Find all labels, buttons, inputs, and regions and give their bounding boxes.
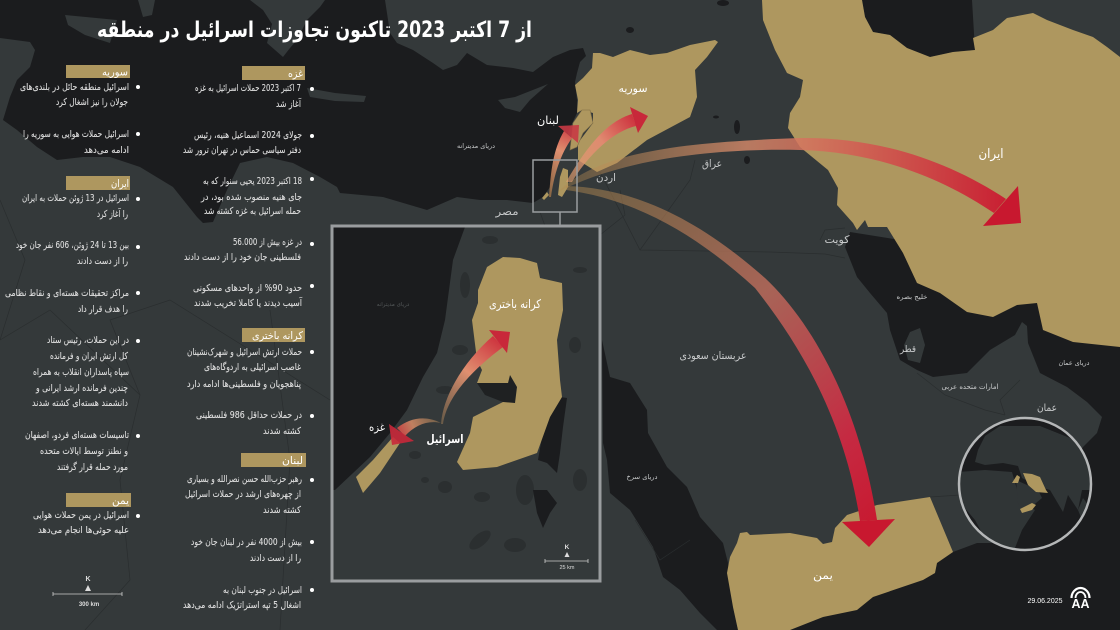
panel: West Bank: حملات ارتش اسرائیل و شهرک‌نشینان: [187, 347, 302, 358]
map: Qatar: [904, 328, 925, 363]
panel: West Bank: غاصب اسرائیلی به اردوگاه‌های: [204, 361, 301, 373]
panel: Lebanon: اشغال 5 تپه استراتژیک ادامه می‌دهد: [183, 600, 301, 611]
inset label: Mediterranean: دریای مدیترانه: [377, 302, 410, 308]
panel: Syria: جولان را نیز اشغال کرد: [56, 97, 128, 108]
inset: Dead Sea: [533, 397, 567, 528]
scale bar: [53, 576, 122, 608]
panel: Yemen: یمن: [112, 495, 129, 507]
panel: Gaza: فلسطینی جان خود را از دست دادند: [184, 252, 301, 263]
panel: Iran: [5, 176, 140, 473]
map labels: اردن: [596, 172, 616, 184]
panel: Lebanon: بیش از 4000 نفر در لبنان جان خود: [191, 537, 302, 548]
arrow: to Syria: [566, 107, 648, 182]
panel: Syria: سوریه: [102, 66, 128, 78]
logo: AA: AA: [1072, 596, 1090, 611]
panel: Yemen: علیه حوثی‌ها انجام می‌دهد: [38, 525, 129, 536]
panel: Iran: ایران: [111, 178, 129, 190]
panel: Lebanon: لبنان: [282, 455, 303, 467]
map: Syria: [575, 40, 718, 172]
map: Lebanon: [570, 110, 593, 150]
panel: Iran: در این حملات، رئیس ستاد: [47, 335, 129, 346]
panel: inset map: [332, 226, 600, 581]
panel: Iran: چندین فرمانده ارشد ایرانی و: [35, 383, 128, 394]
panel: Syria: اسرائیل منطقه حائل در بلندی‌های: [20, 82, 129, 93]
panel: Iran: و نطنز توسط ایالات متحده: [40, 446, 128, 457]
panel: Lebanon: [183, 453, 314, 611]
arrow: to Yemen: [566, 186, 895, 547]
inset frame: [332, 226, 600, 581]
map: Yemen: [727, 497, 953, 630]
panel: Lebanon: اسرائیل در جنوب لبنان به: [223, 585, 302, 596]
inset: terrain patches: [409, 236, 587, 553]
map labels: خلیج بصره: [896, 293, 928, 301]
inset scale: [545, 544, 588, 571]
panel: Yemen: [33, 493, 140, 536]
panel: Lebanon: کشته شدند: [263, 505, 301, 516]
map labels: لبنان: [537, 114, 559, 127]
panel: Gaza: دفتر سیاسی حماس در تهران ترور شد: [183, 145, 301, 156]
inset scale: K: [565, 544, 570, 551]
scale bar: K: [85, 576, 91, 583]
panel: Syria: [20, 65, 140, 156]
map labels: [457, 82, 1090, 582]
map: Persian Gulf and Arabian Sea: [790, 232, 1120, 630]
map labels: دریای سرخ: [626, 473, 658, 481]
map labels: قطر: [899, 344, 916, 355]
panel: Iran: دانشمند هسته‌ای کشته شدند: [32, 398, 128, 409]
map labels: عمان: [1037, 403, 1057, 414]
map labels: عربستان سعودی: [680, 350, 746, 362]
globe: [958, 418, 1095, 550]
inset arrow: to Gaza: [389, 418, 441, 445]
panel: Gaza: حمله اسرائیل به غزه کشته شد: [204, 206, 301, 217]
arrow: to Iran: [558, 138, 1021, 226]
logo: AA: [1072, 588, 1090, 611]
panel: Lebanon: رهبر حزب‌الله حسن نصرالله و بسیاری: [187, 474, 302, 485]
panel: Syria: ادامه می‌دهد: [84, 145, 129, 156]
inset: Gaza: [356, 437, 400, 493]
map: Sicily: [65, 15, 117, 43]
map labels: دریای عمان: [1058, 359, 1090, 367]
map: Mediterranean sea: [0, 0, 586, 223]
panel: Gaza: آسیب دیدند یا کاملا تخریب شدند: [194, 296, 302, 309]
panel: Iran: تاسیسات هسته‌ای فردو، اصفهان: [25, 430, 129, 441]
panel: Iran: کل ارتش ایران و فرمانده: [50, 351, 128, 362]
inset label: Israel: اسرائیل: [426, 432, 464, 446]
inset label: West Bank: کرانه باختری: [489, 297, 541, 312]
panel: West Bank: کشته شدند: [263, 426, 301, 437]
scale bar: 300 km: [79, 602, 99, 608]
panel: Lebanon: را از دست دادند: [250, 553, 301, 564]
map labels: عراق: [702, 158, 722, 170]
panel: Iran: مورد حمله قرار گرفتند: [57, 461, 128, 473]
arrow: to Lebanon: [549, 125, 579, 197]
map labels: سوریه: [618, 82, 648, 95]
map: Greece: [250, 0, 325, 57]
inset: West Bank: [457, 257, 563, 470]
inset: sea: [333, 227, 465, 490]
panel: Gaza: غزه: [288, 68, 303, 80]
panel: Yemen: اسرائیل در یمن حملات هوایی: [33, 510, 129, 521]
map: Crete: [307, 88, 366, 102]
panel: West Bank: [187, 328, 314, 437]
panel: Syria: اسرائیل حملات هوایی به سوریه را: [23, 129, 129, 140]
panel: Gaza: جولای 2024 اسماعیل هنیه، رئیس: [194, 130, 302, 141]
panel: Iran: بین 13 تا 24 ژوئن، 606 نفر جان خود: [16, 240, 129, 251]
inset scale: 25 km: [560, 565, 575, 571]
panel: Gaza: 7 اکتبر 2023 حملات اسرائیل به غزه: [195, 83, 301, 94]
panel: Gaza: [183, 66, 314, 309]
map: Italy toe: [138, 0, 155, 17]
map: West Bank and Gaza small: [542, 168, 568, 200]
globe: highlighted countries: [1012, 473, 1048, 513]
map labels: مصر: [494, 206, 518, 218]
map labels: دریای مدیترانه: [457, 142, 495, 150]
date: 29.06.2025: [1027, 598, 1063, 605]
title: از 7 اکتبر 2023 تاکنون تجاوزات اسرائیل در منطقه: [97, 18, 532, 43]
panel: West Bank: در حملات حداقل 986 فلسطینی: [196, 410, 302, 421]
panel: Iran: مراکز تحقیقات هسته‌ای و نقاط نظامی: [5, 288, 129, 299]
map: Red Sea: [602, 340, 738, 630]
map labels: کویت: [824, 234, 850, 246]
panel: Gaza: آغاز شد: [276, 97, 301, 110]
inset label: Gaza: غزه: [369, 421, 385, 434]
map: borders and lakes: [0, 160, 1020, 630]
map labels: یمن: [813, 569, 833, 582]
panel: Iran: را از دست دادند: [77, 256, 128, 267]
map labels: ایران: [978, 147, 1004, 162]
panel: Gaza: حدود 90% از واحدهای مسکونی: [193, 283, 302, 294]
panel: Gaza: 18 اکتبر 2023 یحیی سنوار که به: [203, 176, 302, 187]
panel: Gaza: جای هنیه منصوب شده بود، در: [200, 192, 302, 203]
inset: Jerusalem dark area: [477, 375, 517, 405]
map labels: امارات متحده عربی: [942, 383, 999, 391]
panel: Iran: اسرائیل در 13 ژوئن حملات به ایران: [22, 193, 129, 204]
map: Caspian Sea: [862, 0, 975, 57]
map: Iran: [762, 0, 1120, 347]
panel: Gaza: در غزه بیش از 56.000: [233, 237, 302, 248]
panel: West Bank: پناهجویان و فلسطینی‌ها ادامه دارد: [187, 379, 301, 390]
panel: Iran: را آغاز کرد: [97, 207, 128, 220]
panel: Iran: را هدف قرار داد: [78, 304, 128, 315]
panel: Lebanon: از چهره‌های ارشد در حملات اسرائیل: [185, 489, 301, 500]
panel: West Bank: کرانه باختری: [252, 330, 303, 342]
locator box and connector: [533, 160, 577, 226]
map: Cyprus: [498, 84, 548, 112]
panel: Iran: سپاه پاسداران انقلاب به همراه: [33, 367, 129, 378]
inset arrow: to West Bank: [441, 330, 510, 424]
